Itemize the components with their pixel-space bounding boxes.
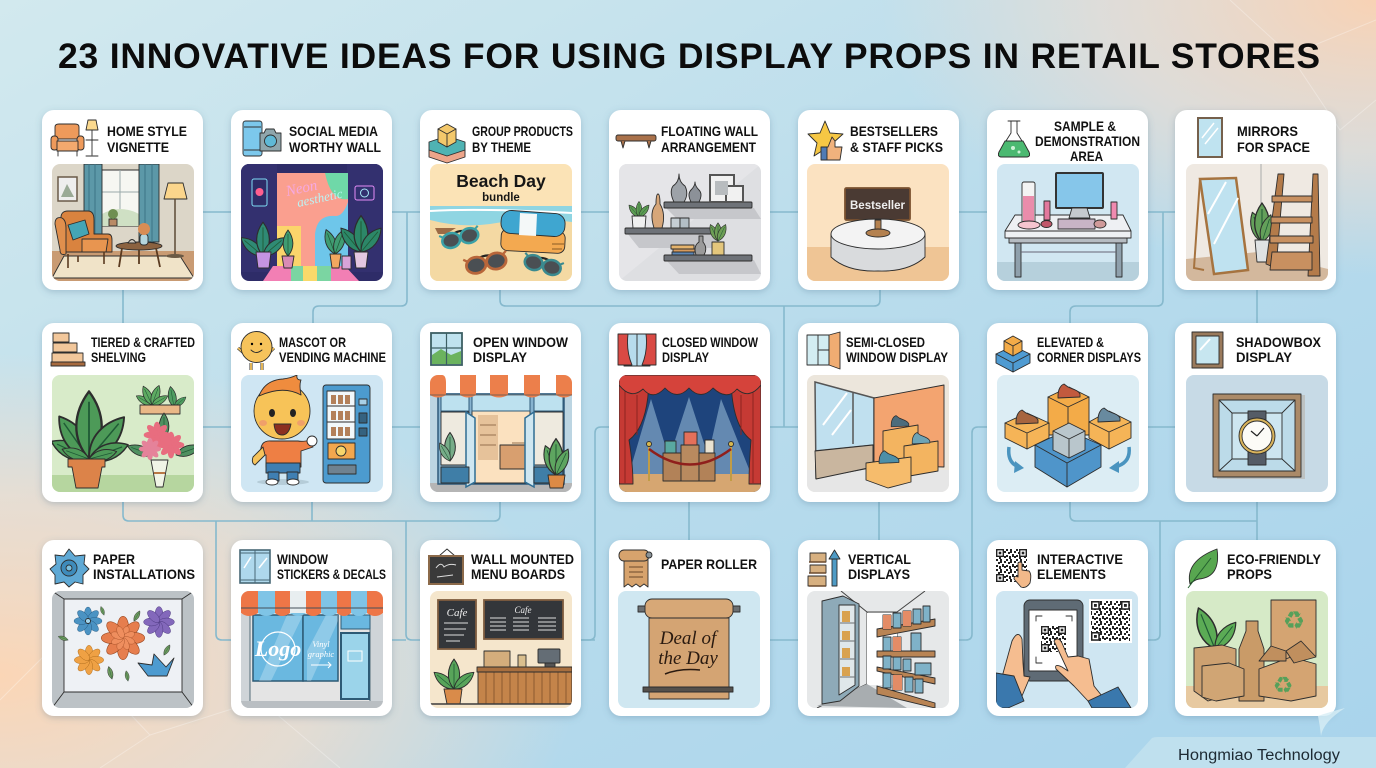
card: tiered and crafted shelving	[42, 323, 203, 502]
illustration: neon wall	[238, 164, 386, 281]
footer sparkle	[1318, 708, 1345, 736]
card: mascot or vending machine	[231, 323, 392, 502]
heading: INTERACTIVE	[1037, 551, 1123, 567]
illustration: framed watch	[1186, 375, 1328, 492]
icon: stacked cubes	[996, 336, 1030, 372]
illustration: corner shelving	[807, 591, 949, 708]
illustration: semi closed window	[807, 375, 949, 492]
card: elevated and corner displays	[987, 323, 1148, 502]
illustration: floating shelves	[619, 164, 761, 281]
heading: OPEN WINDOW	[473, 334, 569, 350]
card: sample and demonstration area: DEMONSTRATION	[1035, 133, 1140, 149]
icon: mirror	[1198, 118, 1222, 157]
card: mirrors for space: FOR SPACE	[1237, 139, 1310, 155]
icon: paper roll	[619, 550, 652, 587]
icon: paper flower	[50, 549, 89, 587]
card: mirrors for space	[1175, 110, 1336, 290]
card: sample and demonstration area: AREA	[1070, 148, 1103, 164]
card: interactive elements	[987, 540, 1148, 716]
illustration: cafe wall: Cafe	[514, 605, 532, 615]
card: floating wall arrangement: ARRANGEMENT	[661, 139, 756, 155]
card: eco-friendly props	[1175, 540, 1336, 716]
icon: open window	[431, 333, 462, 365]
illustration: mascot and vending machine	[241, 375, 383, 492]
card: home style vignette: VIGNETTE	[107, 139, 169, 155]
heading: TIERED & CRAFTED	[91, 334, 195, 350]
illustration: isometric pedestals	[997, 375, 1139, 492]
card: eco-friendly props: PROPS	[1227, 566, 1272, 582]
illustration: paper flowers in frame	[52, 591, 194, 708]
icon: flask	[998, 121, 1030, 157]
card: bestsellers and staff picks	[798, 110, 959, 290]
footer brand tag: Hongmiao Technology	[1178, 747, 1340, 764]
illustration: deal of the day roll	[618, 591, 760, 708]
icon: stacked boxes	[429, 124, 465, 163]
icon: half-open panel	[807, 332, 840, 369]
heading: PAPER ROLLER	[661, 556, 757, 572]
card: window stickers and decals: STICKERS & DECALS	[277, 566, 386, 582]
icon: shadowbox frame	[1192, 332, 1223, 368]
icon: tiered steps	[51, 333, 85, 366]
illustration: demo desk	[997, 164, 1139, 281]
icon: star with thumbs up	[808, 121, 843, 160]
card: social media worthy wall	[231, 110, 392, 290]
connector lines	[123, 212, 1257, 640]
illustration: bestseller pedestal: Bestseller	[850, 200, 906, 212]
title: 23 INNOVATIVE IDEAS FOR USING DISPLAY PROPS IN RETAIL STORES	[58, 36, 1320, 76]
illustration: mirror and ladder shelf	[1186, 164, 1328, 281]
illustration: storefront with decals: Logo	[254, 636, 301, 661]
icon: phone and camera	[243, 121, 281, 156]
heading: WINDOW	[277, 551, 329, 567]
heading: SOCIAL MEDIA	[289, 123, 378, 139]
heading: GROUP PRODUCTS	[472, 123, 573, 139]
card: wall mounted menu boards	[420, 540, 581, 716]
illustration: beach day bundle: bundle	[482, 192, 520, 204]
card: wall mounted menu boards: MENU BOARDS	[471, 566, 565, 582]
illustration: beach day bundle	[430, 164, 572, 281]
illustration: eco props	[1186, 591, 1328, 708]
card: paper roller	[609, 540, 770, 716]
heading: SEMI-CLOSED	[846, 334, 925, 350]
illustration: tablet scanning qr	[996, 591, 1138, 708]
heading: WALL MOUNTED	[471, 551, 574, 567]
illustration: curtained stage	[619, 375, 761, 492]
illustration: storefront with decals: graphic	[308, 649, 334, 659]
heading: ELEVATED &	[1037, 334, 1104, 350]
card: shadowbox display: DISPLAY	[1236, 349, 1293, 365]
illustration: living room	[52, 164, 194, 281]
heading: ECO-FRIENDLY	[1227, 551, 1322, 567]
card: open window display	[420, 323, 581, 502]
illustration: neon wall: aesthetic	[296, 186, 344, 210]
icon: armchair and lamp	[51, 120, 98, 156]
card: group products by theme	[420, 110, 581, 290]
illustration: bestseller pedestal	[807, 164, 949, 281]
card: vertical displays	[798, 540, 959, 716]
heading: BESTSELLERS	[850, 123, 938, 139]
card: elevated and corner displays: CORNER DISPLAYS	[1037, 349, 1141, 365]
icon: qr code with finger	[996, 549, 1031, 588]
card: paper installations	[42, 540, 203, 716]
heading: FLOATING WALL	[661, 123, 758, 139]
heading: CLOSED WINDOW	[662, 334, 759, 350]
card: semi-closed window display	[798, 323, 959, 502]
card: group products by theme: BY THEME	[472, 139, 531, 155]
heading: MASCOT OR	[279, 334, 346, 350]
card: closed window display: DISPLAY	[662, 349, 710, 365]
card: window stickers and decals	[231, 540, 392, 716]
card: tiered and crafted shelving: SHELVING	[91, 349, 146, 365]
card: open window display: DISPLAY	[473, 349, 528, 365]
card: closed window display	[609, 323, 770, 502]
illustration: cafe wall	[430, 591, 572, 708]
card: interactive elements: ELEMENTS	[1037, 566, 1106, 582]
card: paper installations: INSTALLATIONS	[93, 566, 195, 582]
illustration: deal of the day roll: Deal of	[659, 628, 719, 649]
heading: SHADOWBOX	[1236, 334, 1322, 350]
illustration: eco props: ♻	[1273, 672, 1293, 698]
heading: MIRRORS	[1237, 123, 1298, 139]
icon: shelves and up arrow	[808, 550, 840, 586]
heading: SAMPLE &	[1054, 118, 1116, 134]
icon: leaf	[1188, 549, 1218, 588]
card: bestsellers and staff picks: & STAFF PICKS	[850, 139, 943, 155]
icon: curtained window	[618, 334, 656, 366]
heading: HOME STYLE	[107, 123, 187, 139]
illustration: neon wall: Neon	[284, 178, 319, 200]
illustration: storefront with decals: Vinyl	[312, 639, 330, 649]
icon: mascot	[238, 332, 274, 370]
illustration: plants and bouquet	[48, 375, 202, 492]
heading: VERTICAL	[848, 551, 911, 567]
card: floating wall arrangement	[609, 110, 770, 290]
illustration: cafe wall: Cafe	[447, 607, 468, 619]
card: mascot or vending machine: VENDING MACHINE	[279, 349, 386, 365]
card: shadowbox display	[1175, 323, 1336, 502]
illustration: deal of the day roll: the Day	[658, 648, 718, 669]
card: sample and demonstration area	[987, 110, 1148, 290]
illustration: open storefront	[430, 375, 573, 492]
card: vertical displays: DISPLAYS	[848, 566, 910, 582]
heading: PAPER	[93, 551, 135, 567]
illustration: eco props: ♻	[1283, 607, 1305, 635]
icon: window with decal	[240, 550, 270, 583]
card: social media worthy wall: WORTHY WALL	[289, 139, 381, 155]
illustration: beach day bundle: Beach Day	[456, 171, 546, 191]
card: home style vignette	[42, 110, 203, 290]
footer brand tag	[1125, 737, 1376, 768]
illustration: storefront with decals	[241, 591, 383, 708]
icon: floating shelf	[616, 135, 656, 148]
card: semi-closed window display: WINDOW DISPLAY	[846, 349, 949, 365]
icon: hanging chalkboard	[429, 549, 463, 584]
